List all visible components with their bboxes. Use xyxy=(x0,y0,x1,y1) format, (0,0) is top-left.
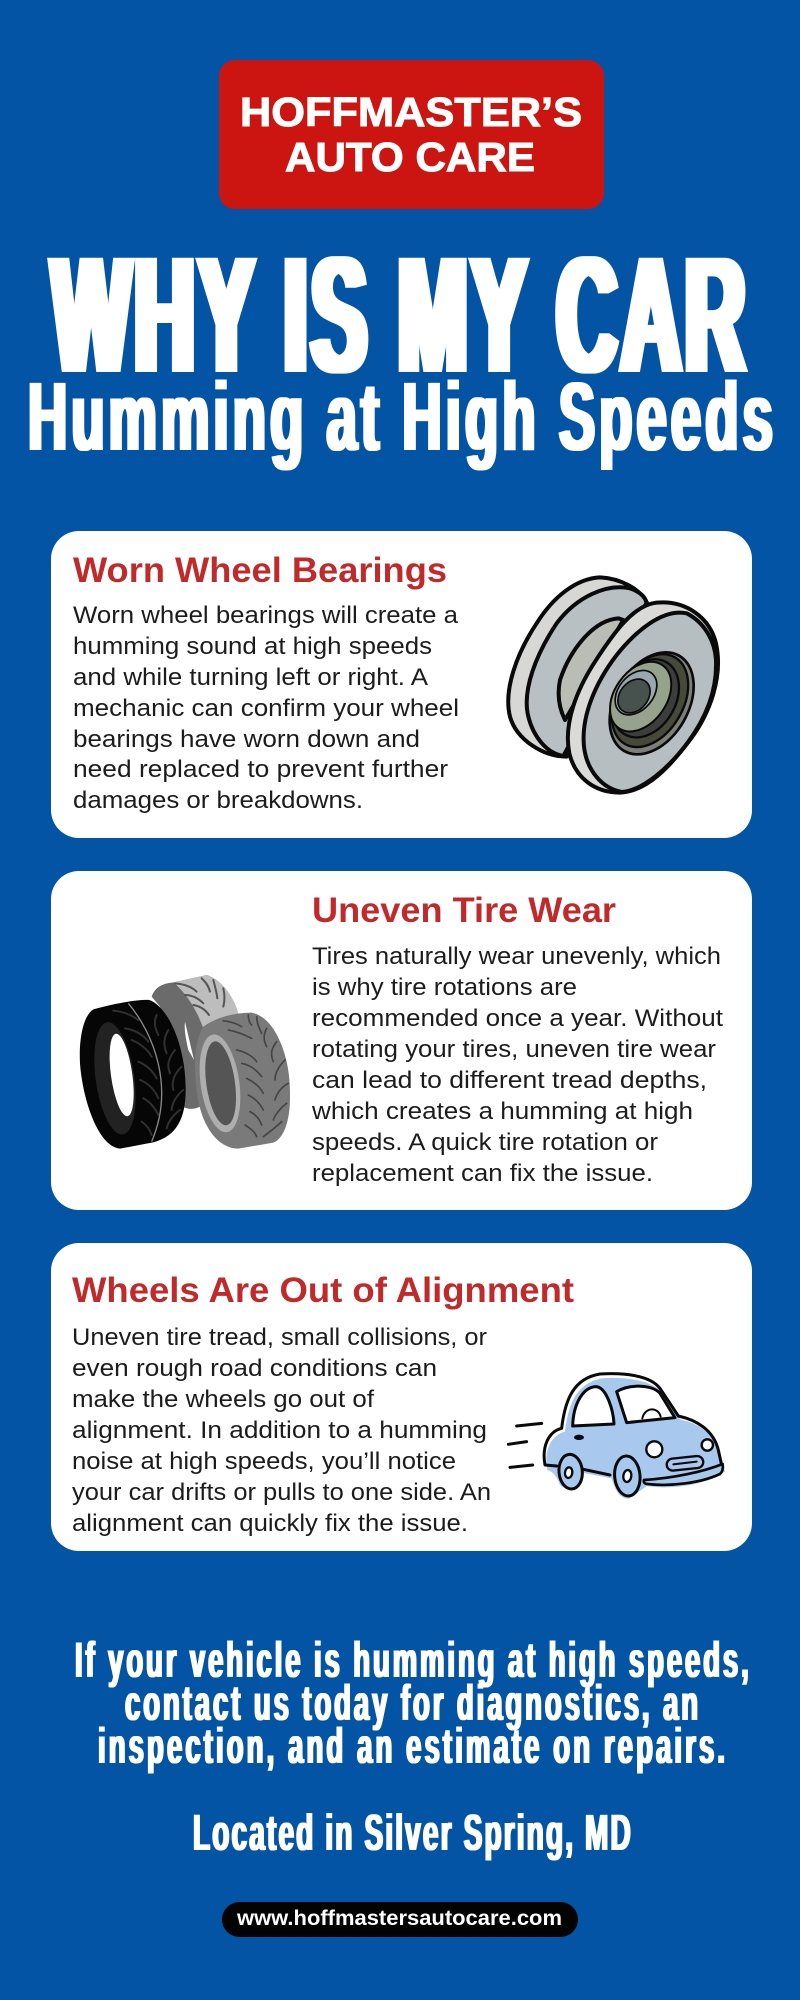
text block: uneven tire wear xyxy=(311,943,723,1187)
panel: wheels out of alignment xyxy=(51,1243,752,1551)
text block: worn wheel bearings: and while turning left or right. A xyxy=(73,664,428,691)
text block: wheels out of alignment: your car drifts or pulls to one side. An xyxy=(72,1479,491,1506)
text block: uneven tire wear: replacement can fix the issue. xyxy=(312,1160,653,1187)
text block: uneven tire wear: rotating your tires, uneven tire wear xyxy=(312,1036,716,1063)
call to action text: If your vehicle is humming at high speeds, xyxy=(75,1631,749,1688)
text block: uneven tire wear: which creates a humming at high xyxy=(311,1098,693,1125)
text block: worn wheel bearings xyxy=(73,602,459,814)
heading: worn wheel bearings: Worn Wheel Bearings xyxy=(73,551,447,590)
text block: wheels out of alignment: noise at high speeds, you’ll notice xyxy=(72,1448,456,1475)
panel: uneven tire wear xyxy=(51,871,752,1210)
text block: worn wheel bearings: need replaced to prevent further xyxy=(73,756,448,783)
website pill xyxy=(222,1902,578,1937)
text block: worn wheel bearings: Worn wheel bearings will create a xyxy=(73,602,459,629)
text block: wheels out of alignment: alignment. In addition to a humming xyxy=(72,1417,487,1444)
heading: uneven tire wear: Uneven Tire Wear xyxy=(312,891,616,930)
text block: uneven tire wear: is why tire rotations are xyxy=(312,974,577,1001)
title xyxy=(28,221,773,471)
text block: uneven tire wear: speeds. A quick tire rotation or xyxy=(312,1129,658,1156)
call to action text: inspection, and an estimate on repairs. xyxy=(98,1717,725,1774)
text block: wheels out of alignment: even rough road conditions can xyxy=(72,1355,437,1382)
heading: wheels out of alignment: Wheels Are Out of Alignment xyxy=(72,1271,574,1310)
text block: wheels out of alignment: alignment can quickly fix the issue. xyxy=(72,1510,468,1537)
logo badge xyxy=(219,60,604,209)
icon: wheel bearing xyxy=(508,577,718,793)
icon: stack of tires xyxy=(80,975,290,1149)
website pill: www.hoffmastersautocare.com xyxy=(236,1907,562,1930)
title: Humming at High Speeds xyxy=(28,362,773,471)
location text: Located in Silver Spring, MD xyxy=(193,1804,631,1861)
title: WHY IS MY CAR xyxy=(52,221,745,407)
icon: speeding blue car xyxy=(508,1374,725,1499)
text block: worn wheel bearings: humming sound at high speeds xyxy=(73,633,432,660)
text block: uneven tire wear: recommended once a year. Without xyxy=(312,1005,723,1032)
text block: wheels out of alignment xyxy=(72,1324,491,1537)
text block: worn wheel bearings: damages or breakdowns. xyxy=(73,787,363,814)
text block: worn wheel bearings: mechanic can confirm your wheel xyxy=(73,695,459,722)
text block: uneven tire wear: can lead to different tread depths, xyxy=(312,1067,707,1094)
call to action text xyxy=(75,1631,749,1774)
text block: wheels out of alignment: Uneven tire tread, small collisions, or xyxy=(72,1324,487,1351)
text block: uneven tire wear: Tires naturally wear unevenly, which xyxy=(312,943,721,970)
panel: worn wheel bearings xyxy=(51,531,752,838)
call to action text: contact us today for diagnostics, an xyxy=(125,1674,698,1731)
logo badge: AUTO CARE xyxy=(285,134,535,180)
text block: wheels out of alignment: make the wheels go out of xyxy=(72,1386,374,1413)
logo badge: HOFFMASTER’S xyxy=(240,89,582,135)
text block: worn wheel bearings: bearings have worn down and xyxy=(73,726,420,753)
